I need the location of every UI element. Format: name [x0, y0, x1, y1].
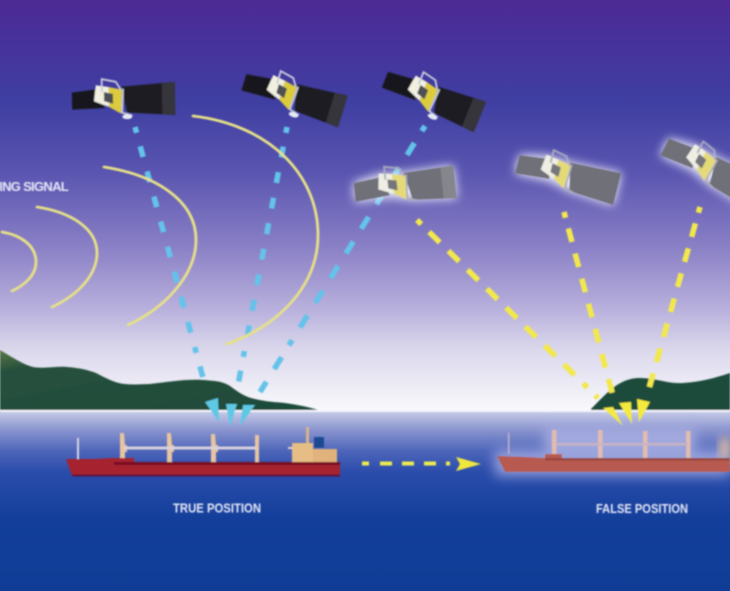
beam: satellite 3: [260, 126, 425, 392]
satellite 3: [378, 60, 488, 136]
ship masts and booms: [77, 433, 259, 463]
sea background: [0, 411, 730, 591]
false satellite 2: [513, 142, 623, 205]
true position ship: [66, 427, 340, 476]
false position ship: [495, 428, 730, 476]
spoofing signal wavefronts: [2, 116, 318, 344]
horizon line: [0, 410, 730, 412]
satellite 2: [238, 62, 349, 131]
sky background: [0, 0, 730, 412]
ship masts and booms: [508, 430, 690, 459]
beam: satellite 2: [237, 127, 287, 390]
ship superstructure: [720, 438, 730, 459]
true signal arrowheads: [205, 398, 255, 427]
false signal beams: [417, 207, 700, 398]
false satellite 1: [352, 160, 457, 209]
beam: false satellite 1: [417, 220, 598, 398]
satellite 1: [72, 78, 175, 120]
label: false position: FALSE POSITION: [596, 502, 688, 516]
ship superstructure: [288, 427, 337, 463]
dashed arrow between positions: [362, 457, 481, 471]
beam: false satellite 2: [564, 212, 613, 396]
ship hull: [497, 454, 730, 472]
right hills: [591, 373, 730, 410]
beam: satellite 1: [135, 127, 205, 385]
ship hull: [66, 458, 340, 476]
ship glow: [495, 428, 730, 476]
left hills: [0, 350, 321, 411]
true signal beams: [135, 126, 425, 392]
false signal arrowheads: [603, 399, 650, 426]
beam: false satellite 3: [648, 207, 700, 392]
label: true position: TRUE POSITION: [173, 502, 261, 516]
false satellite 3: [657, 127, 730, 207]
